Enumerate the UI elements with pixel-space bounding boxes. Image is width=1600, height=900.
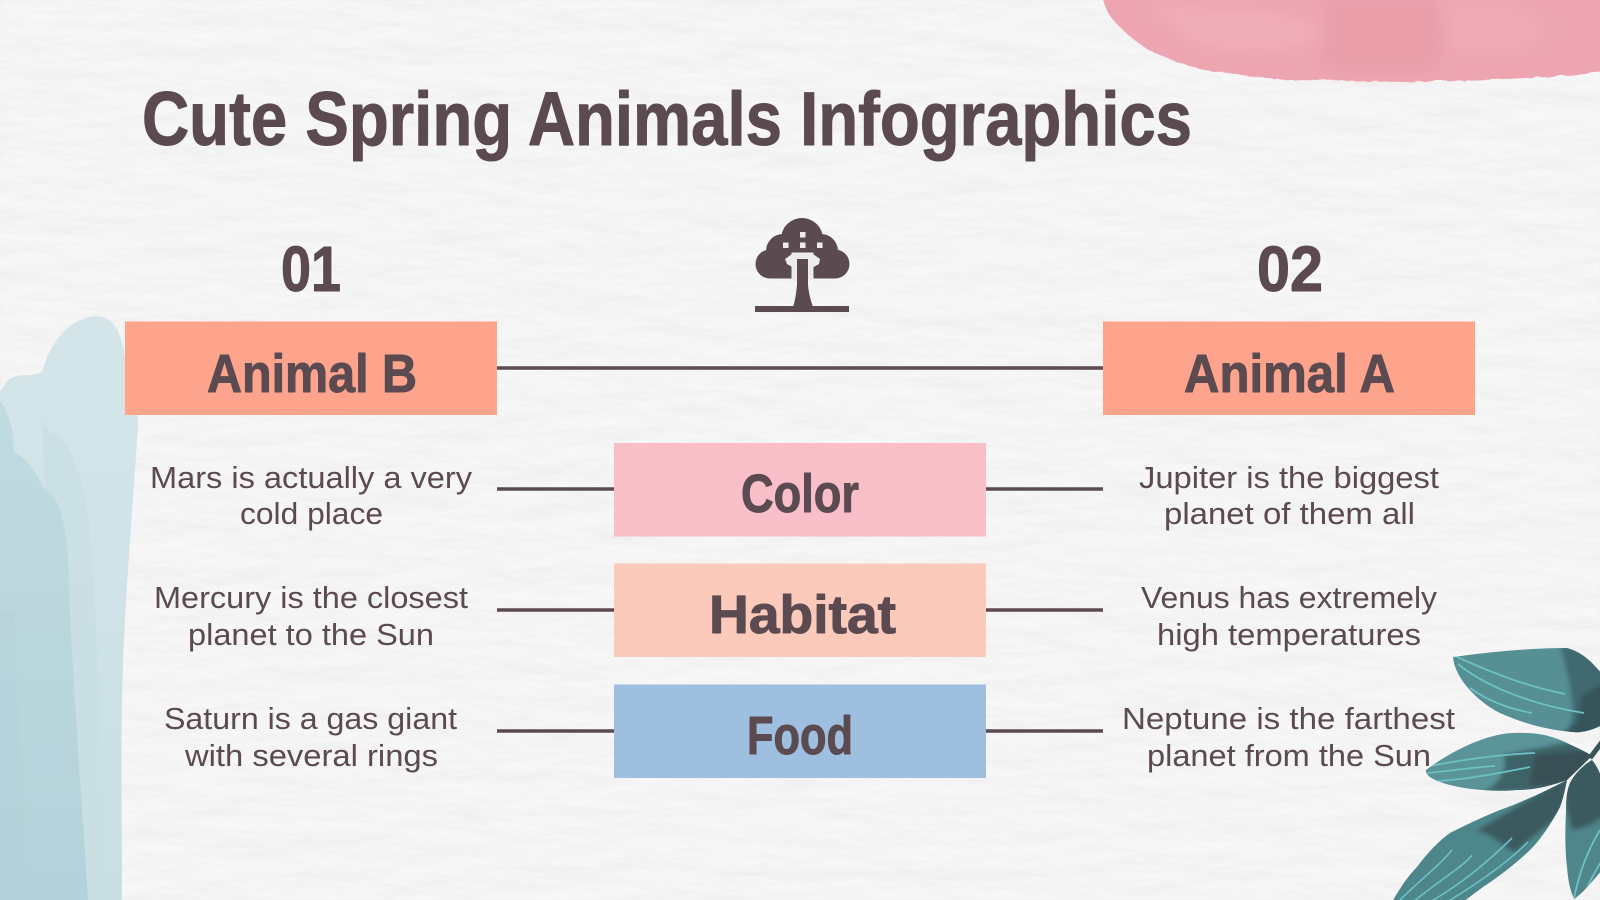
leaf 1: [1453, 648, 1600, 732]
text: Animal A food: planet from the Sun: [1147, 738, 1431, 773]
text: Animal A color: planet of them all: [1164, 496, 1415, 531]
text: Animal B color: Mars is actually a very: [150, 460, 473, 495]
row: Food: [497, 684, 1103, 778]
number: 02: 02: [1257, 233, 1323, 305]
text: Animal A food: [1122, 701, 1455, 773]
header box: Animal B: Animal B: [207, 344, 417, 404]
text: Animal B habitat: [154, 580, 468, 652]
row: Food: Food: [747, 706, 853, 766]
decoration: pink watercolor blob: [1103, 0, 1600, 82]
text: Animal A habitat: Venus has extremely: [1141, 580, 1438, 615]
text: Animal B food: Saturn is a gas giant: [164, 701, 457, 736]
header box: Animal B: [125, 322, 497, 415]
text: Animal B color: cold place: [240, 496, 383, 531]
row: Color: Color: [741, 464, 859, 524]
number: 01: 01: [281, 233, 341, 305]
text: Animal B habitat: planet to the Sun: [188, 617, 434, 652]
text: Animal A habitat: [1141, 580, 1438, 652]
connector: animal header line: [497, 366, 1103, 370]
leaf 2: [1426, 732, 1590, 791]
header box: Animal A: Animal A: [1184, 344, 1395, 404]
header box: Animal A: [1103, 322, 1475, 415]
icon: tree: [755, 218, 850, 312]
text: Animal B habitat: Mercury is the closest: [154, 580, 468, 615]
text: Animal B food: with several rings: [184, 738, 438, 773]
decoration: teal leaves: [1388, 645, 1600, 900]
row: Habitat: Habitat: [709, 585, 896, 645]
stem: [1590, 742, 1600, 758]
text: Animal A food: Neptune is the farthest: [1122, 701, 1455, 736]
decoration: blue watercolor strokes: [0, 316, 138, 900]
title: Cute Spring Animals Infographics: [142, 77, 1192, 162]
leaf 3: [1388, 775, 1570, 900]
text: Animal B color: [150, 460, 473, 531]
text: Animal A color: Jupiter is the biggest: [1139, 460, 1439, 495]
leaf 4: [1565, 760, 1600, 899]
row: Habitat: [497, 564, 1103, 657]
text: Animal B food: [164, 701, 457, 773]
text: Animal A habitat: high temperatures: [1157, 617, 1421, 652]
row: Color: [497, 443, 1103, 536]
text: Animal A color: [1139, 460, 1439, 531]
